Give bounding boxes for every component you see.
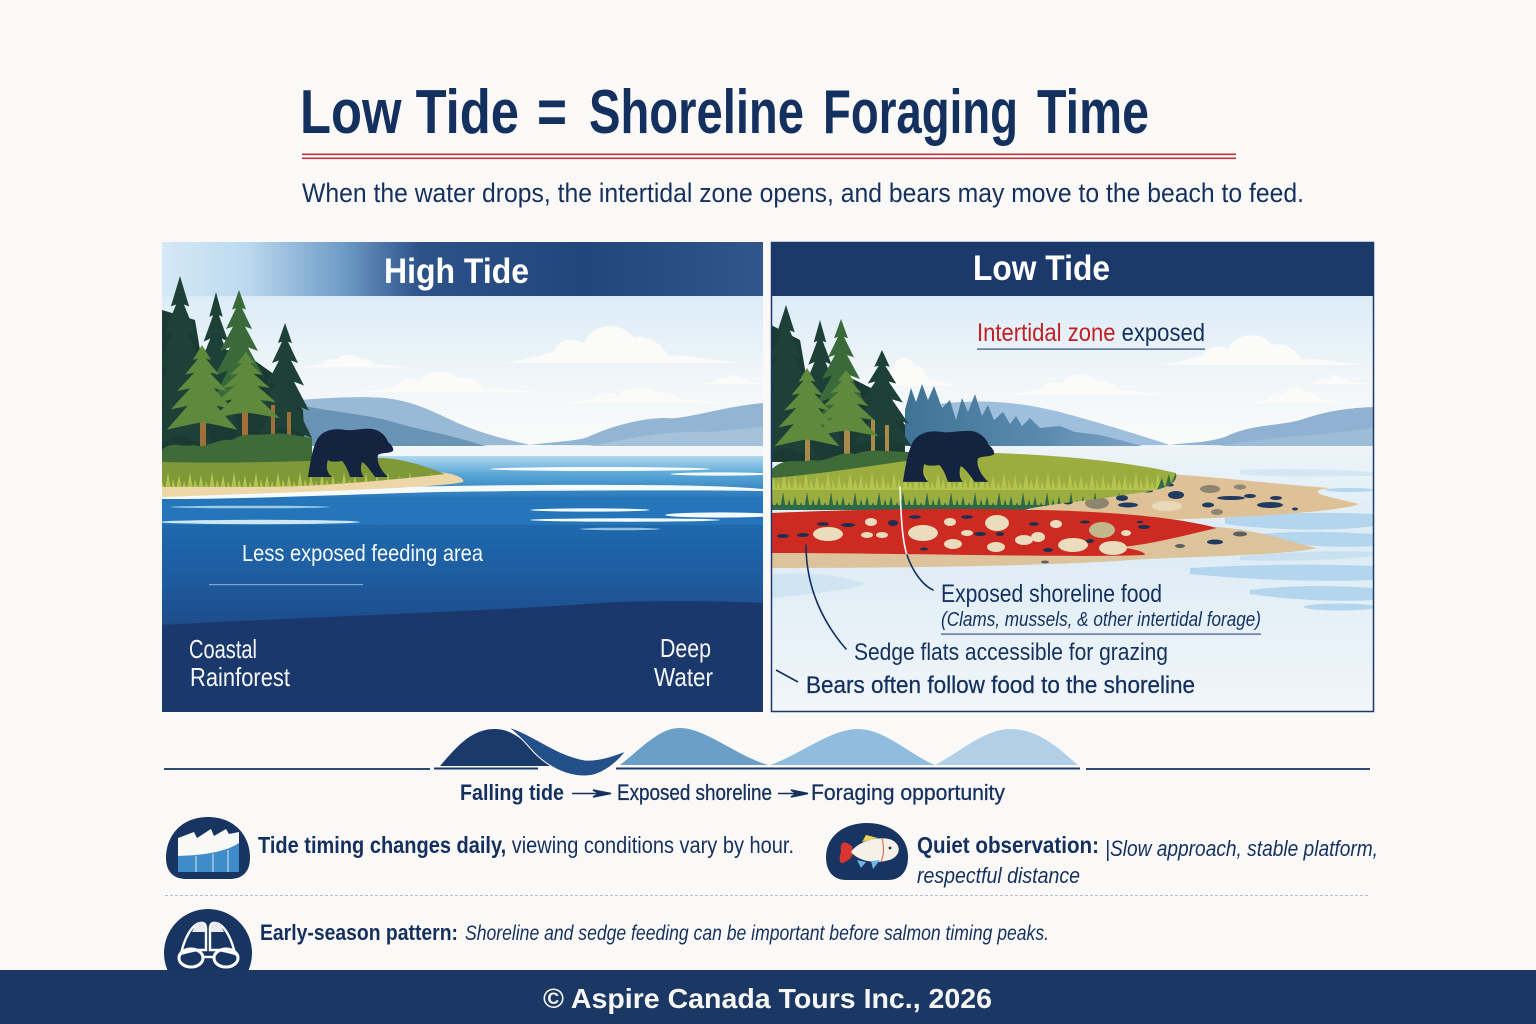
- water streaks: [771, 469, 1376, 610]
- deep water label: Deep: [660, 633, 711, 663]
- coastal rainforest trees: [162, 276, 312, 462]
- callout: bears follow food: Bears often follow food to the shoreline: [806, 672, 1195, 699]
- callout tick: bears: [776, 670, 798, 682]
- baseline rules: [164, 768, 1370, 770]
- foraging opportunity label: Foraging opportunity: [811, 780, 1006, 805]
- header: low tide: Low Tide: [973, 249, 1110, 288]
- title: Low Tide: [300, 78, 519, 147]
- bear silhouette: [308, 429, 393, 477]
- callout: exposed shoreline food: Exposed shoreline food: [941, 580, 1162, 608]
- title: =: [537, 78, 567, 147]
- high tide sky: [162, 296, 763, 394]
- panel: low tide: [752, 242, 1376, 712]
- upper sand bar with rocks: [1030, 474, 1359, 520]
- falling tide label: Falling tide: [460, 780, 564, 805]
- tip: quiet observation: [917, 832, 1378, 888]
- clams and stones: [777, 515, 1150, 555]
- intertidal zone label: Intertidal zone exposed: [977, 319, 1205, 347]
- arrow: [778, 790, 808, 797]
- callout: sedge flats: Sedge flats accessible for grazing: [854, 639, 1168, 666]
- callout: exposed shoreline food: [941, 580, 1261, 635]
- header: low tide: [771, 242, 1374, 296]
- beach and grass: [162, 458, 463, 497]
- title: Shoreline: [589, 78, 804, 147]
- coastal rainforest label: Coastal: [189, 634, 257, 664]
- water: [771, 446, 1374, 712]
- tide baseline: [434, 768, 1080, 770]
- clouds: [865, 335, 1367, 394]
- feeding area label: Less exposed feeding area: [242, 540, 484, 566]
- callout: exposed shoreline food: (Clams, mussels, & other intertidal forage): [941, 609, 1261, 631]
- tide humps: [440, 728, 1078, 766]
- tip: early-season pattern: Shoreline and sedge feeding can be important before salmon timing peaks.: [465, 922, 1049, 945]
- coastal rainforest label: [190, 639, 290, 686]
- lower sand bar: [771, 527, 1317, 568]
- exposed shoreline label: Exposed shoreline: [617, 780, 772, 805]
- stones on lower sand bar: [1041, 532, 1247, 564]
- tip: early-season pattern: Early-season pattern:: [260, 920, 458, 945]
- faint line: [209, 584, 363, 585]
- bear silhouette: [903, 431, 994, 482]
- falling tide wave: [508, 727, 626, 776]
- title underline: [302, 154, 1236, 159]
- low tide panel border: [772, 242, 1374, 712]
- title: Foraging: [823, 78, 1018, 147]
- clouds: [302, 326, 763, 394]
- distant mountains: [905, 384, 1374, 447]
- tip: early-season pattern: [260, 920, 1049, 945]
- dashed divider: [165, 894, 1370, 896]
- deep water label: Water: [654, 662, 713, 692]
- title: [300, 78, 1149, 147]
- icon: tide chart: [166, 817, 250, 879]
- title: Time: [1037, 78, 1149, 147]
- deep water: [162, 524, 763, 632]
- icon: binoculars: [164, 909, 252, 970]
- header: high tide: [162, 242, 763, 296]
- tip: quiet observation: respectful distance: [917, 863, 1080, 888]
- tip: quiet observation: Quiet observation:: [917, 832, 1099, 858]
- callout line: sedge flats: [806, 545, 846, 649]
- low tide sky: [772, 296, 1373, 394]
- icon: fish: [826, 823, 908, 880]
- tide curve: [164, 727, 1370, 776]
- sedge flats: [771, 453, 1178, 511]
- deep water label: [654, 639, 713, 686]
- footer: [0, 970, 1536, 1024]
- subtitle: When the water drops, the intertidal zone opens, and bears may move to the beach to feed.: [302, 178, 1304, 208]
- callout line: shoreline food: [900, 487, 933, 590]
- tide sequence: [460, 780, 1006, 805]
- tip: tide timing: Tide timing changes daily, viewing conditions vary by hour.: [258, 832, 794, 858]
- coastal rainforest label: Rainforest: [190, 662, 291, 692]
- water highlights: [160, 446, 775, 530]
- tip: quiet observation: |Slow approach, stable platform,: [1105, 836, 1378, 861]
- arrow: [572, 790, 611, 797]
- dark foreground water: [162, 601, 763, 712]
- header: high tide: High Tide: [384, 252, 529, 291]
- footer: © Aspire Canada Tours Inc., 2026: [543, 983, 992, 1014]
- panel: high tide: [145, 242, 775, 712]
- coastal rainforest trees: [772, 305, 911, 478]
- distant mountains: [300, 397, 763, 447]
- water surface: [162, 446, 763, 498]
- intertidal red zone: [771, 509, 1217, 556]
